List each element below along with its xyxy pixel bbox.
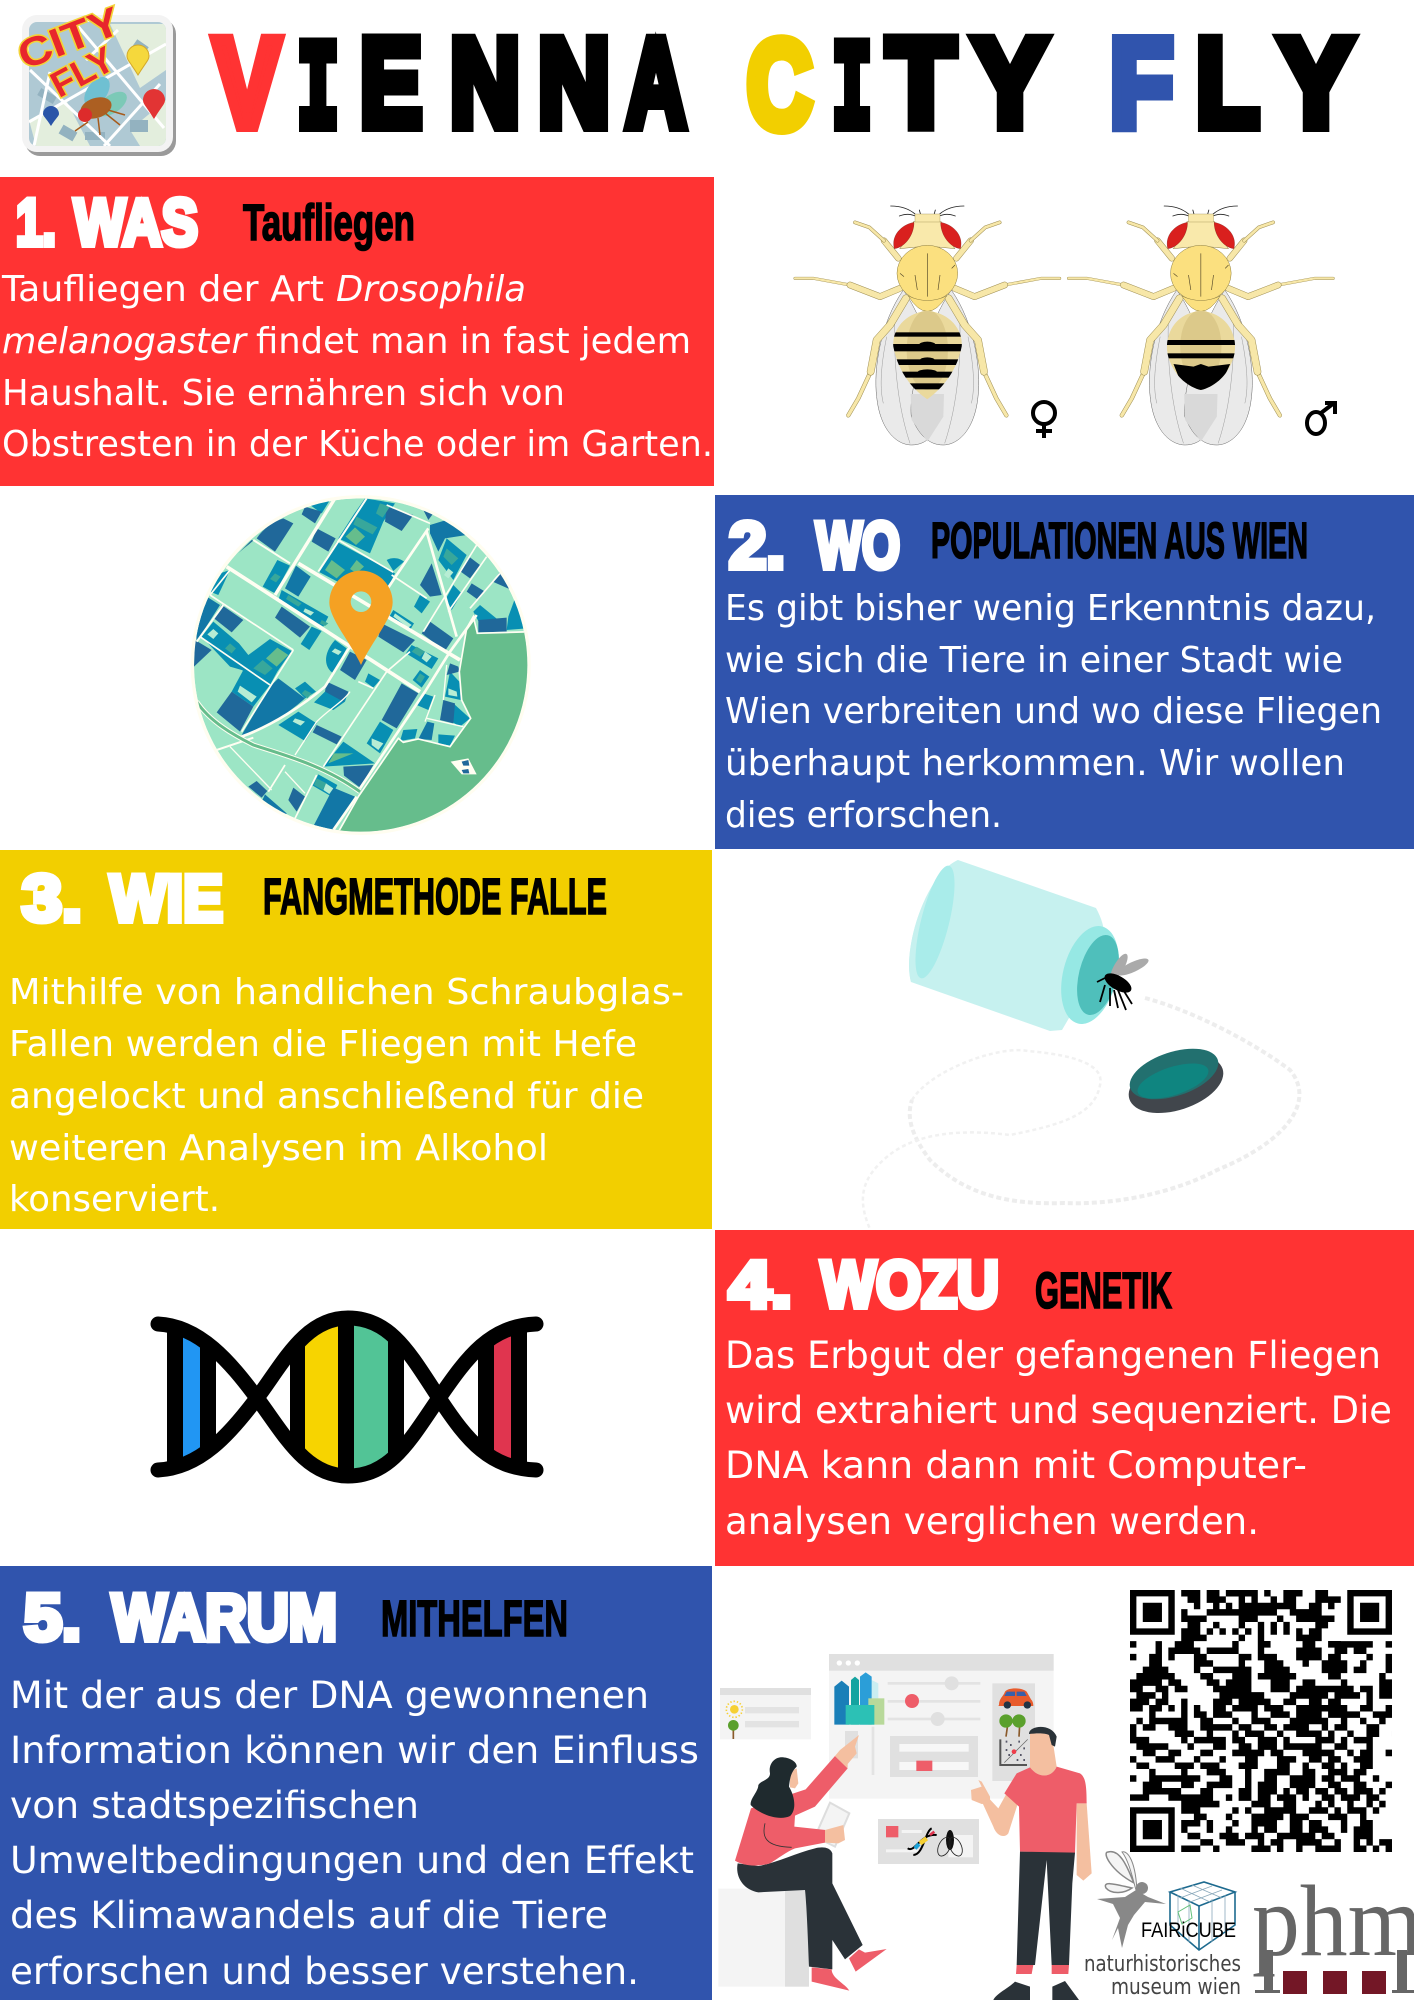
logo: naturhistorisches museum wien: naturhistorisches (1084, 1952, 1241, 1977)
lid (1121, 1039, 1231, 1124)
logo text (12, 0, 127, 105)
woman (735, 1735, 887, 1991)
body text (9, 972, 684, 1220)
heading: 3. WIE (22, 861, 223, 935)
body text: des Klimawandels auf die Tiere (10, 1894, 608, 1937)
body text: Es gibt bisher wenig Erkenntnis dazu, (725, 588, 1376, 629)
body text (725, 1334, 1392, 1543)
illustration: female fruit fly (795, 206, 1060, 445)
body text: Drosophila (336, 269, 526, 310)
title: T (887, 14, 955, 153)
title: A (626, 14, 686, 153)
map blocks teal (195, 498, 527, 797)
subheading: Genetik: GENETIK (1035, 1262, 1172, 1319)
panel: 3 wie (0, 850, 712, 1229)
map blocks mid blue (195, 518, 467, 830)
heading: 5. WARUM: WARUM (112, 1580, 337, 1654)
cube (1170, 1882, 1235, 1950)
QR code (1130, 1590, 1405, 1852)
illustration: jar trap with fly (863, 860, 1299, 1229)
title: N (450, 14, 520, 153)
heading: 3. WIE: WIE (110, 861, 223, 935)
body text: angelockt und anschließend für die (9, 1076, 644, 1117)
body text: findet man in fast jedem (256, 321, 691, 362)
panel: 1 was (0, 177, 714, 486)
logo text: FLY (44, 38, 121, 105)
icon: trees (999, 1714, 1026, 1737)
illustration: people with dashboard (718, 1654, 1092, 2000)
title: I (297, 22, 339, 164)
body text (725, 588, 1382, 836)
heading: 3. WIE: 3. (22, 861, 82, 935)
body text: von stadtspezifischen (10, 1784, 419, 1827)
body text: Das Erbgut der gefangenen Fliegen (725, 1334, 1381, 1377)
logo pins (43, 45, 165, 126)
body text: Wien verbreiten und wo diese Fliegen (725, 691, 1382, 732)
body text: Information können wir den Einfluss (10, 1729, 699, 1772)
logo text: CITY (12, 0, 127, 78)
flight path (863, 998, 1299, 1229)
body text: analysen verglichen werden. (725, 1500, 1259, 1543)
body text: Mithilfe von handlichen Schraubglas- (9, 972, 684, 1013)
logo: naturhistorisches museum wien (1084, 1865, 1414, 2000)
illustration: city map with pin (191, 495, 532, 838)
body text: DNA kann dann mit Computer- (725, 1444, 1307, 1487)
body text: Haushalt. Sie ernähren sich von (2, 373, 565, 414)
body text: Mit der aus der DNA gewonnenen (10, 1674, 649, 1717)
panel: 2 wo (715, 495, 1414, 849)
title: C (747, 16, 812, 155)
small genetics panel (878, 1819, 979, 1864)
logo fly (75, 72, 131, 135)
heading: 1. WAS (16, 185, 198, 259)
dashboard window (829, 1654, 1054, 1799)
title: V (214, 14, 280, 153)
illustration: DNA helix (158, 1310, 536, 1490)
title: N (538, 14, 610, 153)
body text: Taufliegen der Art (1, 269, 324, 310)
body text: Umweltbedingungen und den Effekt (10, 1839, 694, 1882)
stool (718, 1889, 809, 1987)
title (214, 14, 1353, 164)
logo: City Fly app icon (12, 0, 176, 156)
heading: 2. WO (729, 508, 900, 582)
title: E (360, 14, 422, 153)
roads (197, 498, 500, 830)
body text: Obstresten in der Küche oder im Garten. (2, 424, 713, 465)
body text: melanogaster (2, 321, 248, 362)
icon: female symbol (1033, 402, 1055, 438)
heading: 1. WAS: 1. (16, 185, 56, 259)
subheading: Mithelfen: MITHELFEN (381, 1590, 568, 1647)
body text: überhaupt herkommen. Wir wollen (725, 743, 1345, 784)
heading: 5. WARUM (24, 1580, 337, 1654)
small weather panel (720, 1688, 811, 1739)
heading: 5. WARUM: 5. (24, 1580, 81, 1654)
panel: 5 warum (0, 1566, 712, 2000)
icon: car (998, 1688, 1033, 1709)
subheading: Taufliegen: Taufliegen (243, 194, 415, 251)
map blocks dark (194, 507, 512, 812)
icon: scatter plot (1000, 1739, 1028, 1765)
icon: city skyline (834, 1672, 884, 1725)
body text: weiteren Analysen im Alkohol (9, 1128, 548, 1169)
heading: 2. WO: 2. (729, 508, 785, 582)
title: L (1196, 14, 1259, 153)
title: I (832, 22, 872, 164)
body text: konserviert. (9, 1179, 220, 1220)
heading: 4. WOZU (729, 1247, 999, 1321)
title: F (1110, 14, 1173, 153)
logo: naturhistorisches museum wien: museum wien (1111, 1975, 1241, 2000)
logo: FAIRiCUBE (1097, 1852, 1236, 1950)
heading: 1. WAS: WAS (74, 185, 198, 259)
map block interiors aqua (225, 503, 458, 790)
man (971, 1727, 1092, 2000)
body text: wie sich die Tiere in einer Stadt wie (725, 640, 1343, 681)
illustration: male fruit fly (1068, 206, 1333, 445)
title: Y (973, 14, 1047, 153)
icon: male symbol (1307, 403, 1335, 434)
fairy (1097, 1852, 1166, 1948)
subheading: Fangmethode Falle: FANGMETHODE FALLE (263, 868, 607, 925)
body text: erforschen und besser verstehen. (10, 1950, 639, 1993)
body text (10, 1674, 699, 1993)
FAIRiCUBE wordmark: FAIRiCUBE (1141, 1919, 1236, 1942)
body text (1, 269, 713, 465)
heading: 2. WO: WO (816, 508, 900, 582)
body text: dies erforschen. (725, 795, 1002, 836)
fly (1097, 952, 1151, 1010)
heading: 4. WOZU: 4. (729, 1247, 792, 1321)
heading: 4. WOZU: WOZU (821, 1247, 999, 1321)
map block interiors green (266, 527, 365, 763)
map pin (329, 571, 393, 665)
panel: 4 wozu (715, 1230, 1414, 1566)
map block interiors pale (207, 568, 457, 794)
body text: wird extrahiert und sequenziert. Die (725, 1389, 1392, 1432)
body text: Fallen werden die Fliegen mit Hefe (9, 1024, 637, 1065)
green park (337, 617, 532, 838)
title: Y (1279, 14, 1353, 153)
